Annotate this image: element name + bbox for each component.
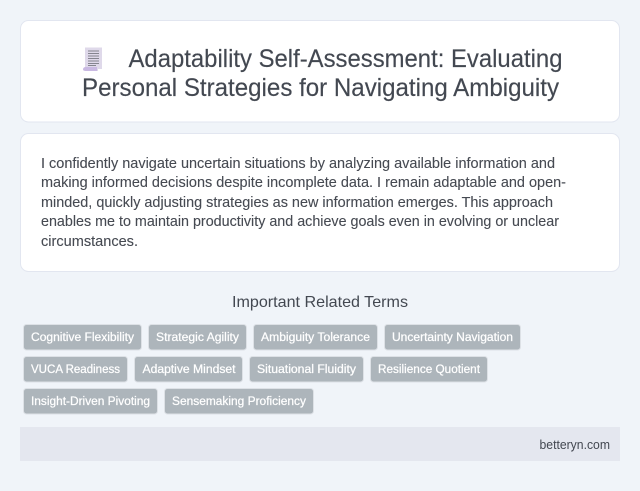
panel: self-assessment statement (20, 134, 620, 272)
title: Personal Strategies for Navigating Ambiguity (82, 74, 559, 102)
tag: Sensemaking Proficiency (164, 388, 314, 414)
title: Adaptability Self-Assessment: Evaluating (128, 45, 562, 73)
tag: VUCA Readiness: VUCA Readiness (31, 362, 120, 376)
text block: statement: enables me to maintain productivity and achieve goals even in evolving or unclear (41, 214, 559, 230)
text block: statement (41, 156, 566, 250)
text block: statement: minded, quickly adjusting strategies as new information emerges. This approach (41, 195, 553, 211)
tag: Resilience Quotient: Resilience Quotient (378, 362, 481, 376)
text block: statement: I confidently navigate uncertain situations by analyzing available information and (41, 156, 555, 172)
tag: Uncertainty Navigation (384, 324, 520, 350)
tag: Insight-Driven Pivoting: Insight-Driven Pivoting (31, 394, 150, 408)
title (82, 45, 562, 102)
tag: Strategic Agility: Strategic Agility (156, 330, 240, 344)
text block: statement: making informed decisions despite incomplete data. I remain adaptable and open- (41, 175, 566, 191)
tag: Cognitive Flexibility: Cognitive Flexibility (31, 330, 135, 344)
tag: Ambiguity Tolerance: Ambiguity Tolerance (261, 330, 370, 344)
icon: scroll document (83, 48, 102, 71)
tag: Ambiguity Tolerance (254, 324, 378, 350)
tag: Resilience Quotient (370, 356, 488, 382)
footer bar (20, 427, 620, 461)
tag: Situational Fluidity: Situational Fluidity (257, 362, 357, 376)
tag: Cognitive Flexibility (24, 324, 142, 350)
tag: Adaptive Mindset: Adaptive Mindset (142, 362, 236, 376)
text block: statement: circumstances. (41, 234, 138, 250)
tag: Insight-Driven Pivoting (24, 388, 158, 414)
tag: VUCA Readiness (24, 356, 128, 382)
footer brand: betteryn.com (540, 438, 610, 452)
tag: Adaptive Mindset (134, 356, 242, 382)
tag: Strategic Agility (148, 324, 246, 350)
heading: important related terms: Important Related Terms (232, 294, 408, 311)
tag: Situational Fluidity (250, 356, 364, 382)
tag list (24, 324, 520, 414)
panel: header card (20, 20, 620, 122)
tag: Sensemaking Proficiency: Sensemaking Proficiency (172, 394, 307, 408)
tag: Uncertainty Navigation: Uncertainty Navigation (392, 330, 513, 344)
